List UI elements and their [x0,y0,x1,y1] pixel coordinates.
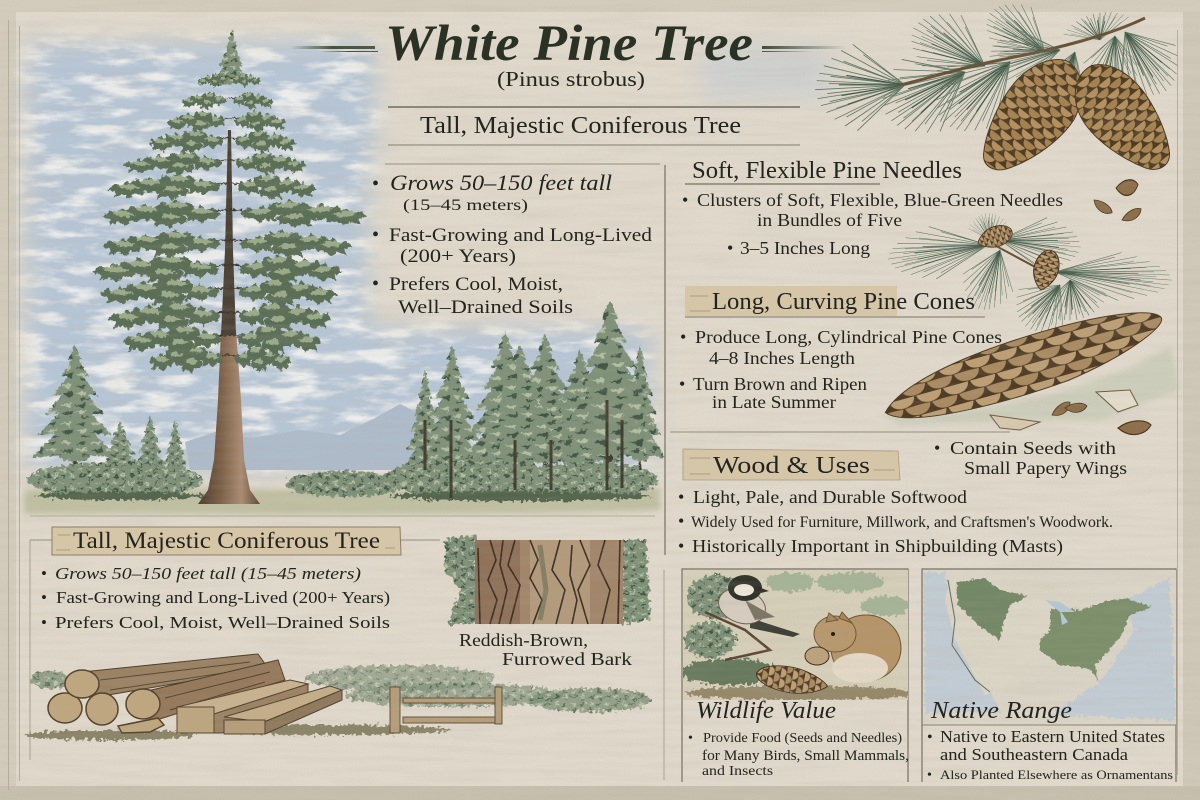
title: White Pine Tree [385,16,753,72]
text block: bottom-left facts: Prefers Cool, Moist, Well–Drained Soils [55,613,390,632]
text block: bottom-left facts: • [41,588,47,607]
foliage at the sides [445,534,650,624]
text block: wildlife: for Many Birds, Small Mammals, [702,748,909,764]
scene: understory trunks [425,400,622,498]
heading: tall majestic coniferous tree: Tall, Majestic Coniferous Tree [420,113,741,139]
text block: cones: • [679,374,685,394]
small beam [224,686,342,722]
text block: needles: Clusters of Soft, Flexible, Blue-Green Needles [697,190,1063,210]
text block: bottom-left facts: • [41,564,47,583]
text block: wildlife [688,731,909,779]
heading: native range: Native Range [930,698,1072,724]
text block: growth facts: • [372,173,379,195]
text block: range: • [927,729,933,746]
text block: wood uses: Historically Important in Shipbuilding (Masts) [692,536,1063,557]
illustration: split-rail fence [390,687,502,733]
text block: wood uses: Light, Pale, and Durable Softwood [693,487,967,507]
scene: background conifers [31,300,665,500]
plank heading: wood and uses: Wood & Uses [713,453,870,479]
caption: bark: Reddish-Brown, [459,630,588,650]
text block: growth facts: Well–Drained Soils [398,297,573,318]
text block: cones [679,327,1002,412]
text block: growth facts: Prefers Cool, Moist, [389,274,563,295]
rear log [82,654,268,698]
text block: seeds [934,438,1127,478]
text block: range: Also Planted Elsewhere as Ornamentans [940,767,1173,782]
right cone [1059,50,1188,188]
text block: needles: • [727,238,733,258]
illustration: scattered seeds with papery wings [990,390,1151,435]
illustration: second needle sprig with small cones [885,210,1173,345]
caption: bark [459,630,632,669]
illustration: stacked logs and beams [48,654,342,734]
panel: native range [922,569,1176,782]
scene: shrubs along the treeline [27,458,658,501]
text block: wildlife: • [688,731,693,746]
text block: range: • [927,768,932,783]
text block: wood uses: • [678,487,684,507]
title flourish right [762,46,847,52]
text block: wildlife: Provide Food (Seeds and Needles) [703,731,902,746]
illustration: main white pine tree [92,30,368,504]
text block: needles: in Bundles of Five [757,210,902,230]
text block: seeds: Contain Seeds with [950,438,1116,458]
text block: growth facts: (15–45 meters) [403,197,528,214]
text block: wildlife: and Insects [702,764,773,779]
text block: cones: Turn Brown and Ripen [693,374,867,394]
text block: cones: Produce Long, Cylindrical Pine Cones [695,327,1002,347]
text block: needles: 3–5 Inches Long [740,238,870,258]
text block: range [927,727,1173,783]
scene: ground meadow [24,488,660,514]
illustration: top pine branch with two cones [813,0,1194,190]
heading: wildlife value: Wildlife Value [696,698,836,724]
illustration: long cylindrical pine cone [876,300,1180,432]
text block: wood uses: • [678,536,684,556]
trunk [198,330,260,504]
text block: wood uses: • [678,511,684,531]
text block: growth facts: • [372,224,379,246]
illustration: fallen seed scales [1091,180,1144,224]
text block: range: Native to Eastern United States [940,727,1165,746]
text block: range: and Southeastern Canada [940,745,1129,764]
land fill [945,586,992,695]
text block: bottom-left facts: Fast-Growing and Long-Lived (200+ Years) [56,588,390,607]
scene: faint blue tint upper right [700,45,830,100]
large beam [177,680,308,714]
plank heading: bottom-left coniferous tree: Tall, Majestic Coniferous Tree [73,528,380,553]
text block: bottom-left facts [41,564,390,632]
foliage [92,30,368,373]
chickadee [714,575,800,637]
text block: growth facts: Grows 50–150 feet tall [390,170,612,195]
heading: soft flexible pine needles: Soft, Flexible Pine Needles [692,158,962,184]
left cone [963,44,1100,190]
plank heading: long curving pine cones: Long, Curving Pine Cones [712,289,975,315]
text block: needles: • [682,190,688,210]
title flourish left [290,46,378,52]
log ends [48,670,164,733]
needles [813,0,1194,151]
plank heading: wood and uses [683,449,900,480]
chipmunk [814,612,901,683]
icon: bark close-up [445,534,650,624]
text block: seeds: • [934,438,940,458]
caption: bark: Furrowed Bark [502,649,632,669]
Great Lakes [1045,600,1075,625]
wildlife illustration [680,570,915,700]
text block: wood uses: Widely Used for Furniture, Millwork, and Craftsmen's Woodwork. [691,514,1113,531]
range map [923,570,1176,725]
scene: sky with clouds [16,32,660,480]
right log [143,660,285,722]
panel: wildlife value [680,569,915,782]
text block: bottom-left facts: • [41,613,47,632]
text block: needles [682,190,1063,258]
text block: cones: • [680,327,686,347]
rule [922,724,1176,726]
Eastern US green zone [1040,598,1152,680]
section frame lines [30,107,1010,780]
scene: distant mountains [185,404,440,470]
branch [705,612,770,660]
west coast [948,580,990,692]
illustration: ground shrubs by the fence [25,665,652,740]
text block: growth facts: (200+ Years) [400,246,516,267]
text block: growth facts: • [372,273,379,295]
subtitle: (Pinus strobus) [497,67,645,91]
text block: wood uses [678,487,1113,557]
text block: seeds: Small Papery Wings [964,458,1127,478]
text block: growth facts: Fast-Growing and Long-Lived [389,225,653,246]
branch stem [900,18,1145,85]
text block: growth facts [372,170,653,318]
text block: cones: 4–8 Inches Length [709,348,855,368]
text block: bottom-left facts: Grows 50–150 feet tall (15–45 meters) [55,564,361,583]
Canadian green zone [956,578,1028,640]
cones [756,665,828,694]
text block: cones: in Late Summer [712,392,836,412]
